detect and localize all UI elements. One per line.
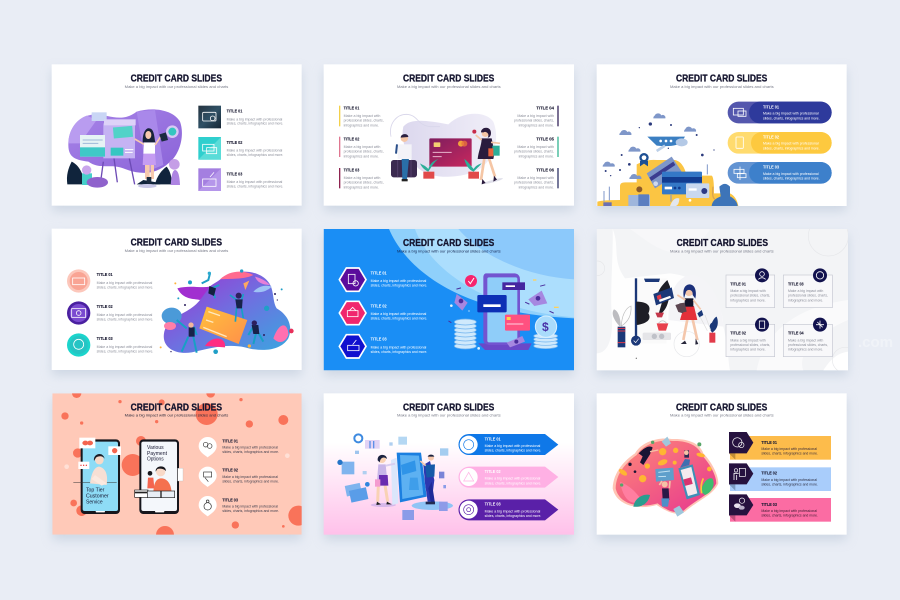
subtitle: Make a big impact with our professional slides and charts xyxy=(397,248,501,253)
box 3: TITLE 03 xyxy=(788,281,804,286)
pill 1 xyxy=(728,102,832,123)
list item 1: Make a big impact with professional xyxy=(371,279,426,283)
ribbon 3 xyxy=(729,494,831,522)
list item 1 xyxy=(199,437,279,457)
list item 2 xyxy=(339,301,427,325)
list item 1: slides, charts, infographics and more. xyxy=(227,122,283,126)
arrow 1: TITLE 01 xyxy=(485,436,501,441)
list item 3: slides, charts, infographics and more. xyxy=(227,184,283,188)
list item 1 xyxy=(198,106,283,128)
slide 3: pill list with yellow hill xyxy=(597,64,847,211)
left item 3 xyxy=(339,167,384,189)
list item 2: Make a big impact with professional xyxy=(371,312,426,316)
icon: coin stack xyxy=(734,498,745,510)
phone: various payment options: Options xyxy=(147,456,164,462)
list item 2 xyxy=(67,301,153,325)
subtitle: Make a big impact with our professional slides and charts xyxy=(125,248,228,253)
list item 3: slides, charts, infographics and more. xyxy=(97,349,153,353)
list item 2: slides, charts, infographics and more. xyxy=(97,317,153,321)
arrow 2: slides, charts, infographics and more. xyxy=(485,481,541,485)
arrow 1 xyxy=(458,434,558,455)
list item 2 xyxy=(199,467,279,487)
left item 2: Make a big impact with xyxy=(344,145,380,149)
list item 2: TITLE 02 xyxy=(227,140,243,145)
ribbon 2: Make a big impact with professional xyxy=(761,478,817,482)
list item 1 xyxy=(339,268,427,291)
right item 5: TITLE 05 xyxy=(536,136,554,141)
list item 3: Make a big impact with professional xyxy=(97,345,152,349)
ribbon 2: slides, charts, infographics and more. xyxy=(761,483,818,487)
list item 2 xyxy=(198,137,283,160)
icon: person with card xyxy=(734,468,745,480)
arrow 3: Make a big impact with professional xyxy=(485,509,540,513)
left item 3: infographics and more. xyxy=(344,185,379,189)
box 3 xyxy=(783,268,832,308)
list item 2: slides, charts, infographics and more. xyxy=(222,480,279,484)
box 4: Make a big impact with xyxy=(788,338,823,342)
credit card xyxy=(429,138,472,167)
icon: wallet tile xyxy=(198,106,221,128)
right item 4 xyxy=(514,105,559,127)
pill 2 xyxy=(728,132,832,154)
list item 2: TITLE 02 xyxy=(371,303,387,308)
right item 5: infographics and more. xyxy=(519,154,554,158)
right item 6: Make a big impact with xyxy=(517,176,554,180)
pill 3: TITLE 03 xyxy=(763,165,779,170)
list item 3: TITLE 03 xyxy=(227,172,243,177)
right item 4: Make a big impact with xyxy=(517,114,554,118)
left item 1: Make a big impact with xyxy=(344,114,380,118)
slide 6: grey boxes with shopper xyxy=(594,229,850,378)
list item 3: Make a big impact with professional xyxy=(227,180,282,184)
list item 1: TITLE 01 xyxy=(222,438,238,443)
left item 3: TITLE 03 xyxy=(344,167,360,172)
list item 1: Make a big impact with professional xyxy=(97,281,152,285)
illustration: phone and shopper xyxy=(613,278,718,359)
slide 2: six titles around card xyxy=(324,64,574,211)
illustration: people on a giant card xyxy=(160,269,294,354)
list item 1: Make a big impact with professional xyxy=(222,445,278,449)
pink card xyxy=(505,315,530,331)
list item 1 xyxy=(67,269,153,293)
icon: coins pin xyxy=(199,437,217,457)
pill 2: Make a big impact with professional xyxy=(763,142,819,146)
box 4: TITLE 04 xyxy=(788,331,804,336)
illustration: phone with cards and coins xyxy=(448,273,559,350)
list item 2: slides, charts, infographics and more. xyxy=(371,317,427,321)
icon: card tile xyxy=(198,137,221,160)
box 2: infographics and more. xyxy=(730,348,766,352)
arrow 1: Make a big impact with professional xyxy=(485,444,540,448)
phone: top tier customer service: Customer xyxy=(86,494,109,500)
icon: banknote circle xyxy=(67,301,90,325)
icon: receipt card xyxy=(733,108,746,116)
icon: cart hexagon xyxy=(339,335,366,358)
box 4 xyxy=(783,318,832,357)
ribbon 1: slides, charts, infographics and more. xyxy=(761,452,818,456)
left item 2 xyxy=(339,136,384,158)
list item 1: TITLE 01 xyxy=(97,272,113,277)
box 4: professional slides, charts, xyxy=(788,343,828,347)
icon: coin badge xyxy=(460,501,478,519)
illustration: cards on yellow hill xyxy=(597,113,738,206)
illustration: travellers with credit card xyxy=(390,114,503,185)
subtitle: Make a big impact with our professional slides and charts xyxy=(670,248,774,253)
list item 1: slides, charts, infographics and more. xyxy=(97,285,153,289)
icon: coin circle xyxy=(67,333,90,357)
left item 1: TITLE 01 xyxy=(344,105,360,110)
icon: phone xyxy=(736,137,743,148)
icon: piggy pin xyxy=(199,496,217,516)
arrow 1: slides, charts, infographics and more. xyxy=(485,449,541,453)
box 1: professional slides, charts, xyxy=(730,294,770,298)
box 4: infographics and more. xyxy=(788,348,823,352)
slide 8: arrow list on pink gradient xyxy=(324,393,574,540)
phone: top tier customer service: Top Tier xyxy=(86,488,105,494)
icon: face badge xyxy=(460,436,478,454)
list item 2: Make a big impact with professional xyxy=(222,475,278,479)
box 2: Make a big impact with xyxy=(730,338,766,342)
list item 3 xyxy=(67,333,153,357)
left item 2: infographics and more. xyxy=(344,154,379,158)
slide 9: brain with ribbon list xyxy=(597,393,847,540)
box 2: TITLE 02 xyxy=(730,331,746,336)
watermark text: .com xyxy=(858,334,893,351)
phone: top tier customer service xyxy=(73,438,121,514)
phone: various payment options: Payment xyxy=(147,451,167,457)
icon: user badge xyxy=(755,268,769,282)
right item 6: professional slides, charts, xyxy=(514,181,554,185)
icon: signpost xyxy=(734,167,746,180)
icon: basket tile xyxy=(198,168,221,191)
list item 3: slides, charts, infographics and more. xyxy=(222,509,279,513)
list item 3 xyxy=(339,335,427,358)
icon: coins swap xyxy=(733,438,744,448)
illustration: phone with cards and coins: $ xyxy=(542,320,549,334)
ribbon 3: Make a big impact with professional xyxy=(761,509,817,513)
right item 6: TITLE 06 xyxy=(536,167,554,172)
pill 3 xyxy=(728,162,832,184)
list item 3: TITLE 03 xyxy=(222,497,238,502)
title: CREDIT CARD SLIDES xyxy=(131,74,222,85)
credit card xyxy=(199,307,247,344)
list item 3 xyxy=(198,168,283,191)
list item 1: slides, charts, infographics and more. xyxy=(371,284,427,288)
arrow 3: TITLE 03 xyxy=(485,502,501,507)
title: CREDIT CARD SLIDES xyxy=(131,402,222,413)
icon: person badge xyxy=(460,468,478,486)
box 1: TITLE 01 xyxy=(730,281,746,286)
slide 5: blue hexagon list with phone xyxy=(324,229,574,376)
illustration: woman presenting at board xyxy=(67,109,182,188)
dark blue card xyxy=(477,295,507,312)
list item 3: TITLE 03 xyxy=(371,337,387,342)
list item 3: TITLE 03 xyxy=(97,336,113,341)
phone: various payment options: Various xyxy=(147,445,164,451)
box 2 xyxy=(726,318,775,357)
arrow 2 xyxy=(458,467,558,488)
icon: card hand pin xyxy=(199,467,217,487)
title: CREDIT CARD SLIDES xyxy=(676,402,767,413)
ribbon 3: slides, charts, infographics and more. xyxy=(761,514,818,518)
right item 4: infographics and more. xyxy=(519,123,554,127)
list item 1: TITLE 01 xyxy=(371,270,387,275)
left item 3: Make a big impact with xyxy=(344,176,380,180)
title: CREDIT CARD SLIDES xyxy=(403,238,494,249)
pill 3: slides, charts, infographics and more. xyxy=(763,177,820,181)
list item 2: Make a big impact with professional xyxy=(227,149,282,153)
title: CREDIT CARD SLIDES xyxy=(403,402,494,413)
left item 1: professional slides, charts, xyxy=(344,119,384,123)
right item 5 xyxy=(514,136,559,158)
icon: document badge xyxy=(755,318,769,332)
ribbon 2 xyxy=(729,463,831,491)
subtitle: Make a big impact with our professional slides and charts xyxy=(125,413,228,418)
left item 2: TITLE 02 xyxy=(344,136,360,141)
subtitle: Make a big impact with our professional slides and charts xyxy=(670,84,774,89)
title: CREDIT CARD SLIDES xyxy=(676,74,767,85)
slide 4: circle list with colourful blob xyxy=(52,229,302,375)
pill 1: slides, charts, infographics and more. xyxy=(763,116,820,120)
subtitle: Make a big impact with our professional slides and charts xyxy=(397,84,501,89)
phone: top tier customer service: Service xyxy=(86,499,103,505)
right item 6 xyxy=(514,167,559,189)
ribbon 1: TITLE 01 xyxy=(761,440,777,445)
pill 2: slides, charts, infographics and more. xyxy=(763,146,820,150)
phone: various payment options xyxy=(135,439,183,514)
list item 2: TITLE 02 xyxy=(97,304,113,309)
list item 1: Make a big impact with professional xyxy=(227,117,282,121)
phone with cart xyxy=(678,464,700,499)
list item 1: slides, charts, infographics and more. xyxy=(222,450,279,454)
pill 2: TITLE 02 xyxy=(763,134,779,139)
list item 3: slides, charts, infographics and more. xyxy=(371,350,427,354)
pill 3: Make a big impact with professional xyxy=(763,172,819,176)
list item 2: slides, charts, infographics and more. xyxy=(227,153,283,157)
list item 2: Make a big impact with professional xyxy=(97,313,152,317)
list item 3: Make a big impact with professional xyxy=(222,504,278,508)
right item 5: Make a big impact with xyxy=(517,145,554,149)
list item 1: TITLE 01 xyxy=(227,108,243,113)
illustration: brain shaped collage xyxy=(613,437,718,517)
left item 2: professional slides, charts, xyxy=(344,150,384,154)
title: CREDIT CARD SLIDES xyxy=(677,238,768,249)
pill 1: TITLE 01 xyxy=(763,104,779,109)
box 3: infographics and more. xyxy=(788,298,823,302)
list item 3: Make a big impact with professional xyxy=(371,345,426,349)
slide 7: peach dots with two phones xyxy=(52,389,308,544)
subtitle: Make a big impact with our professional slides and charts xyxy=(670,413,774,418)
icon: star badge xyxy=(813,318,827,332)
icon: coin badge xyxy=(813,268,827,282)
icon: basket hexagon xyxy=(339,301,366,325)
box 1 xyxy=(726,268,775,308)
box 2: professional slides, charts, xyxy=(730,343,770,347)
box 1: infographics and more. xyxy=(730,298,766,302)
title: CREDIT CARD SLIDES xyxy=(403,74,494,85)
icon: receipt hexagon xyxy=(339,268,366,291)
arrow 3: slides, charts, infographics and more. xyxy=(485,514,541,518)
list item 2: TITLE 02 xyxy=(222,468,238,473)
title: CREDIT CARD SLIDES xyxy=(131,238,222,249)
right item 4: professional slides, charts, xyxy=(514,119,554,123)
subtitle: Make a big impact with our professional slides and charts xyxy=(397,413,501,418)
ribbon 3: TITLE 03 xyxy=(761,502,777,507)
right item 5: professional slides, charts, xyxy=(514,150,554,154)
arrow 2: Make a big impact with professional xyxy=(485,477,540,481)
left item 1: infographics and more. xyxy=(344,123,379,127)
illustration: two people at giant phone xyxy=(337,434,453,520)
box 3: Make a big impact with xyxy=(788,289,823,293)
right item 4: TITLE 04 xyxy=(536,105,554,110)
slide 1: purple presentation board xyxy=(52,64,302,211)
box 1: Make a big impact with xyxy=(730,289,766,293)
arrow 2: TITLE 02 xyxy=(485,469,501,474)
box 3: professional slides, charts, xyxy=(788,294,828,298)
pill 1: Make a big impact with professional xyxy=(763,112,819,116)
right item 6: infographics and more. xyxy=(519,185,554,189)
left item 3: professional slides, charts, xyxy=(344,181,384,185)
ribbon 1 xyxy=(729,432,831,460)
blue card xyxy=(655,468,674,482)
ribbon 2: TITLE 02 xyxy=(761,471,777,476)
list item 3 xyxy=(199,496,279,516)
subtitle: Make a big impact with our professional slides and charts xyxy=(125,84,228,89)
arrow 3 xyxy=(458,499,558,520)
left item 1 xyxy=(339,105,384,127)
ribbon 1: Make a big impact with professional xyxy=(761,447,817,451)
icon: card circle xyxy=(67,269,90,293)
